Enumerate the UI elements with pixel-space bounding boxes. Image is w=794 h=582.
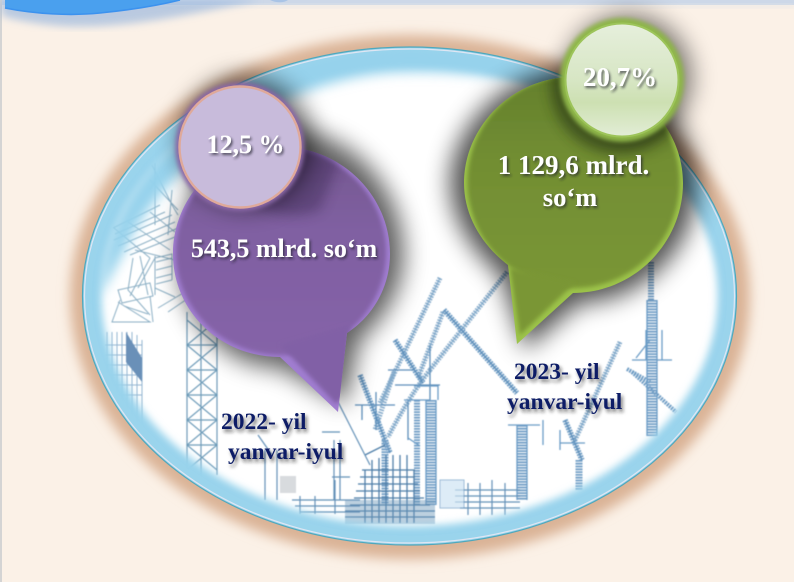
- label: 2023 period: 2023- yil: [514, 359, 600, 385]
- brown oval halo: [70, 35, 750, 559]
- purple speech bubble: [173, 150, 390, 412]
- label: 2023 period: [507, 359, 623, 415]
- crane jibs: [375, 272, 620, 440]
- oval panel with construction scene: [82, 47, 736, 545]
- blue vignette ring: [86, 50, 732, 541]
- crane masts: [385, 262, 652, 505]
- purple bubble shadow: [178, 130, 404, 405]
- left building dark facade: [126, 332, 142, 382]
- value: 1 129,6 mlrd. so‘m: [498, 150, 649, 212]
- building at crane base: [345, 445, 435, 523]
- label: 2022 period: yanvar-iyul: [228, 439, 344, 465]
- left scaffold upper: [110, 165, 185, 324]
- crane booms dark: [360, 310, 676, 460]
- value: 1 129,6 mlrd. so‘m: 1 129,6 mlrd.: [498, 150, 649, 180]
- construction cranes illustration: [105, 163, 676, 524]
- purple percentage circle: [176, 76, 312, 212]
- green percentage circle: [560, 14, 692, 142]
- value: 12,5 %: 12,5 %: [206, 130, 284, 159]
- green bubble shadow: [450, 68, 697, 350]
- value: 1 129,6 mlrd. so‘m: so‘m: [543, 182, 597, 212]
- value: 543,5 mlrd. so‘m: 543,5 mlrd. so‘m: [191, 234, 377, 263]
- top left blue wave: [0, 0, 288, 27]
- oval outline: [82, 47, 736, 545]
- green speech bubble: [464, 78, 683, 344]
- left building: [105, 332, 142, 425]
- label: 2023 period: yanvar-iyul: [507, 389, 623, 415]
- value: 20,7%: 20,7%: [583, 62, 657, 92]
- label: 2022 period: [221, 409, 344, 465]
- lattice tower: [187, 312, 217, 476]
- label: 2022 period: 2022- yil: [221, 409, 307, 435]
